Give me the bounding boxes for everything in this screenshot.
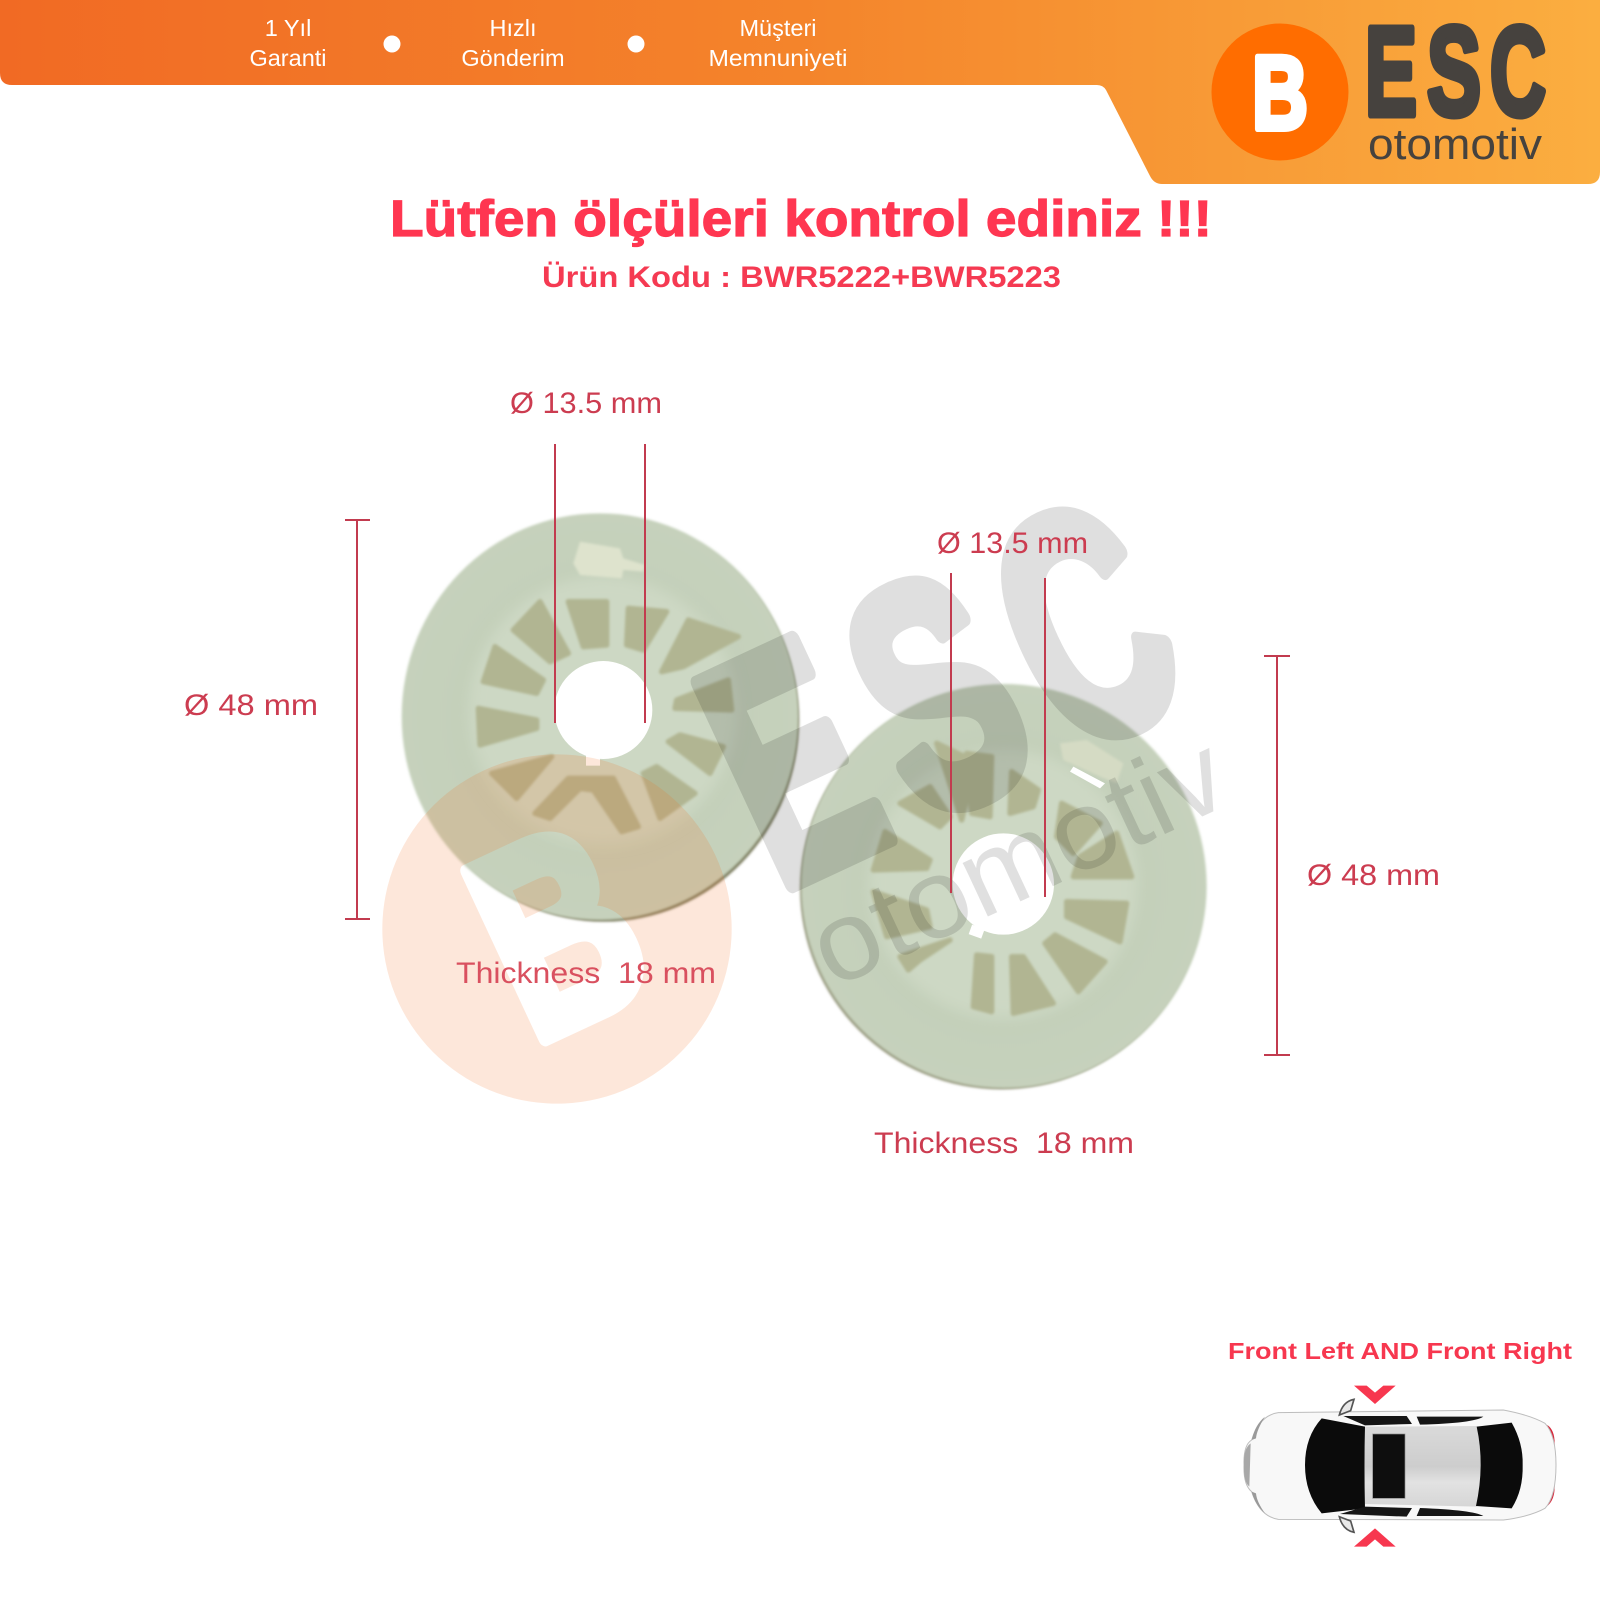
mirror bottom — [1339, 1517, 1354, 1532]
car body — [1244, 1410, 1556, 1520]
dimension lines left pulley — [345, 444, 645, 919]
pulley spoke zone — [870, 751, 1137, 1017]
pulley cable slot — [1070, 767, 1105, 788]
pulley hub hole — [554, 661, 652, 759]
feature: customer satisfaction — [708, 15, 848, 71]
dimension lines right pulley — [951, 573, 1290, 1055]
pulley shadow edge — [409, 520, 799, 922]
title: Lütfen ölçüleri kontrol ediniz !!! — [390, 190, 1212, 247]
bore line left — [950, 573, 952, 893]
watermark ESC: C — [945, 433, 1226, 818]
arrow bottom — [1354, 1528, 1396, 1547]
sunroof — [1373, 1434, 1405, 1498]
logo badge — [1212, 24, 1348, 160]
logo wordmark ESC: S — [1427, 1, 1481, 142]
arrow top — [1354, 1386, 1396, 1404]
pulley windows — [478, 602, 738, 832]
right outer diameter label: Ø 48 mm — [1307, 859, 1440, 892]
feature: warranty — [249, 15, 327, 71]
header features — [249, 15, 848, 71]
product code: Ürün Kodu : BWR5222+BWR5223 — [542, 261, 1061, 294]
windshield — [1305, 1418, 1365, 1513]
bore line right — [1044, 578, 1046, 897]
right thickness label: Thickness 18 mm — [874, 1127, 1134, 1160]
watermark ESC: E — [656, 572, 928, 953]
watermark ESC — [656, 433, 1226, 953]
side windows bottom — [1340, 1507, 1483, 1517]
feature: warranty: 1 Yıl — [265, 15, 311, 41]
pulley left — [402, 513, 799, 922]
logo — [1212, 1, 1546, 169]
logo wordmark ESC: C — [1490, 1, 1546, 142]
mirror top — [1339, 1399, 1354, 1415]
pulley windows — [873, 743, 1132, 1013]
watermark badge — [382, 754, 732, 1104]
watermark ESC: S — [799, 503, 1075, 886]
feature: warranty: Garanti — [249, 45, 327, 71]
headlight bottom — [1252, 1492, 1265, 1513]
roof — [1364, 1426, 1481, 1507]
tail lights — [1547, 1425, 1555, 1506]
bullet dot — [384, 36, 400, 52]
feature: fast shipping: Gönderim — [461, 45, 565, 71]
watermark logo — [382, 506, 1214, 1104]
watermark otomotiv: otomotiv — [789, 709, 1245, 1011]
dimension labels — [184, 387, 1440, 1160]
logo wordmark ESC — [1365, 1, 1546, 142]
logo wordmark ESC: E — [1365, 1, 1417, 142]
pulley keyway notch — [586, 755, 600, 766]
feature: customer satisfaction: Memnuniyeti — [708, 45, 848, 71]
left outer diameter label: Ø 48 mm — [184, 689, 318, 722]
logo letter B: B — [1252, 35, 1308, 152]
outer diameter bracket — [345, 520, 370, 919]
right bore label: Ø 13.5 mm — [937, 527, 1088, 560]
side windows top — [1343, 1416, 1483, 1425]
logo wordmark otomotiv: otomotiv — [1368, 120, 1542, 169]
headlight top — [1252, 1417, 1265, 1440]
bullet dot — [628, 36, 644, 52]
pulley keyway notch — [969, 925, 985, 939]
pulley hub hole — [953, 833, 1054, 935]
pulley body — [801, 684, 1207, 1088]
header banner — [0, 0, 1600, 184]
pulley cable tab — [573, 542, 645, 578]
car top view — [1244, 1386, 1556, 1547]
left bore label: Ø 13.5 mm — [510, 387, 662, 420]
pulley body — [402, 513, 798, 920]
pulley shadow edge — [800, 688, 1203, 1089]
pulley spoke zone — [470, 577, 737, 843]
feature: fast shipping — [461, 15, 565, 71]
pulley right — [800, 684, 1207, 1089]
feature: customer satisfaction: Müşteri — [739, 15, 817, 41]
bore line left — [554, 444, 556, 723]
position label: Front Left AND Front Right — [1228, 1338, 1572, 1364]
outer diameter bracket — [1264, 656, 1290, 1055]
pulley cable tab — [1060, 740, 1123, 783]
rear window — [1476, 1423, 1523, 1508]
left thickness label: Thickness 18 mm — [456, 957, 716, 990]
bore line right — [644, 444, 646, 723]
grille — [1244, 1443, 1251, 1487]
feature: fast shipping: Hızlı — [490, 15, 536, 41]
